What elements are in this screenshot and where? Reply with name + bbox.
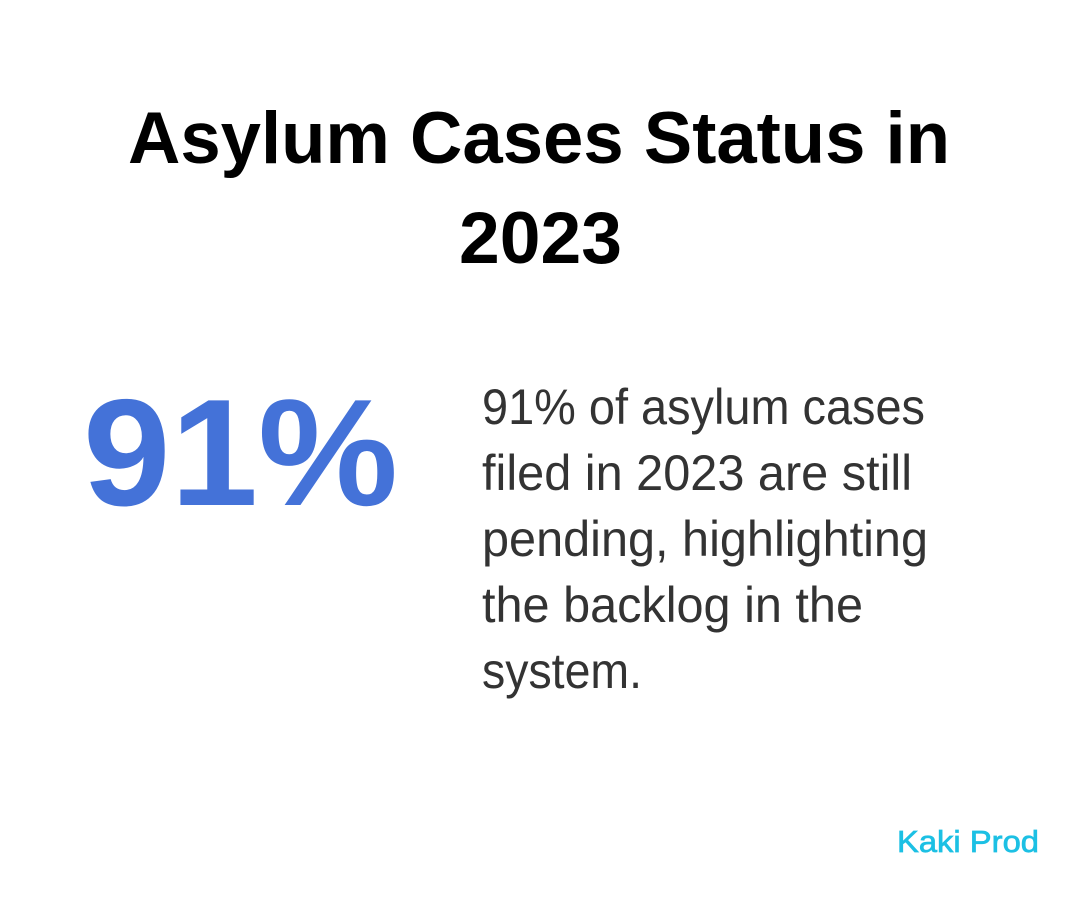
description text: the backlog in the — [482, 577, 863, 633]
description text: pending, highlighting — [482, 511, 928, 567]
title — [128, 98, 950, 279]
big stat: 91%: 91% — [83, 368, 398, 538]
logo: Kaki Prod: Kaki Prod — [897, 824, 1039, 859]
title: 2023 — [459, 198, 622, 279]
description text: filed in 2023 are still — [482, 445, 912, 501]
description text: system. — [482, 643, 642, 699]
description text: 91% of asylum cases — [482, 379, 925, 435]
title: Asylum Cases Status in — [128, 98, 950, 179]
description text — [482, 379, 928, 699]
